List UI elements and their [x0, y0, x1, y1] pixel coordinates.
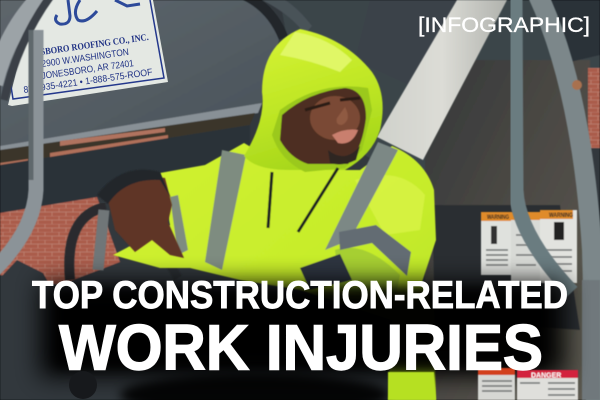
face	[280, 88, 366, 164]
hand and cuff	[97, 170, 184, 258]
white support column	[377, 0, 507, 160]
left grab bars	[0, 0, 52, 270]
sign address text: 870-935-4221 • 1-888-575-ROOF	[23, 67, 153, 96]
warning label text: WARNING	[487, 215, 509, 221]
danger label text: DANGER	[531, 372, 561, 380]
warning labels	[481, 210, 577, 283]
hood	[244, 29, 383, 170]
title line 2: WORK INJURIES	[59, 312, 543, 384]
right structural bars	[515, 0, 600, 400]
dark gradient behind title	[40, 282, 565, 400]
worker in hi-vis hoodie	[113, 29, 436, 400]
warning label text	[487, 213, 573, 221]
warning label text: WARNING	[549, 213, 573, 219]
drawstrings	[268, 168, 338, 232]
sign address text: JONESBORO, AR 72401	[41, 58, 135, 82]
infographic tag: [INFOGRAPHIC]	[418, 13, 590, 37]
sign address text: 2900 W.WASHINGTON	[41, 47, 130, 70]
bottom labels	[478, 368, 578, 400]
sign address text: SBORO ROOFING CO., INC.	[40, 33, 149, 58]
sign address text	[23, 33, 153, 96]
sleeve shadow	[335, 248, 400, 300]
steering wheel	[69, 207, 178, 280]
hoodie hem below title	[388, 372, 436, 400]
sign: Jonesboro Roofing	[8, 0, 168, 106]
reflective stripes	[205, 150, 246, 270]
hoodie body	[113, 143, 436, 400]
sign logo	[56, 0, 140, 24]
